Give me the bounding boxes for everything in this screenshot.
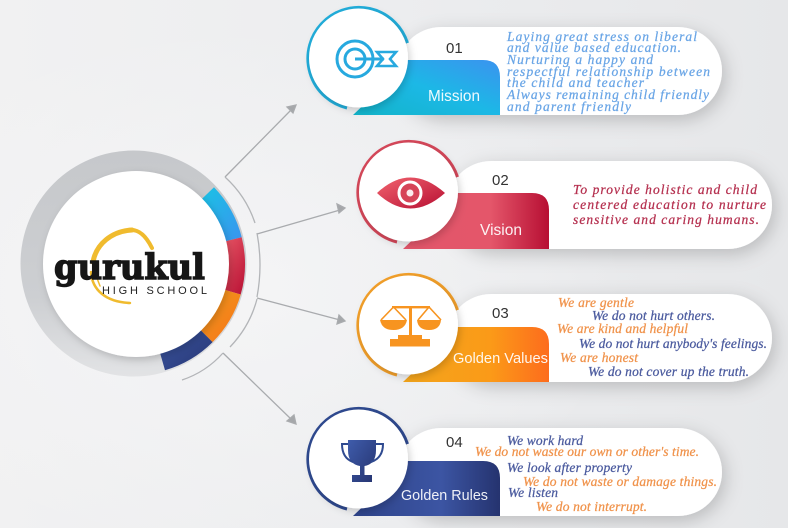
white disc [43,171,229,357]
pill [397,27,722,115]
description: We look after property [507,460,632,475]
pill [397,428,722,516]
ring segment: red [216,237,245,294]
description: We are kind and helpful [557,321,688,336]
number: 04 [446,434,463,451]
icon disc [309,8,408,108]
tab [353,60,500,115]
tab label: Golden Rules [401,488,488,504]
tab [403,193,549,249]
number: 03 [492,305,509,322]
logo wordmark: gurukul [54,247,205,288]
description: We are honest [560,350,639,365]
icon ring [358,141,458,242]
description: respectful relationship between [507,64,710,79]
number: 02 [492,172,509,189]
pill [447,294,772,382]
description: We work hard [507,433,583,448]
description: Always remaining child friendly [506,87,709,102]
description: sensitive and caring humans. [573,212,759,227]
description: We do not hurt others. [592,308,715,323]
description: the child and teacher [507,75,645,90]
description: We do not hurt anybody's feelings. [579,336,767,351]
description: We do not cover up the truth. [588,364,749,379]
icon disc [359,276,458,374]
description: We listen [508,485,558,500]
hub: outer thin arcs [182,177,260,380]
description [506,29,710,114]
description: and value based education. [507,40,681,55]
card 01: mission [308,7,722,115]
description: centered education to nurture [573,197,766,212]
description: We do not interrupt. [536,499,647,514]
logo subtitle: HIGH SCHOOL [102,285,207,297]
description: We do not waste our own or other's time. [475,444,699,459]
tab [403,327,549,382]
tab label: Mission [428,88,480,105]
icon disc [359,142,458,242]
card 02: vision [358,141,772,249]
description [475,433,717,514]
ring segment: navy [158,324,213,370]
description: Laying great stress on liberal [506,29,697,44]
logo swirl [91,230,152,303]
tab label: Vision [480,222,522,239]
card 03: golden values [358,274,772,382]
tab label: Golden Values [453,351,548,367]
description: Nurturing a happy and [506,52,653,67]
icon ring [308,408,408,509]
pill [447,161,772,249]
grey ring [20,150,246,376]
icon: target [337,41,396,77]
description [573,182,766,227]
ring segment: orange [195,287,241,342]
hub: central logo disc [20,150,246,376]
icon: eye [377,178,445,208]
description: To provide holistic and child [573,182,757,197]
logo: gurukul high school [54,230,207,303]
icon disc [309,410,408,508]
arrows from hub to cards [223,105,345,424]
tab [353,461,500,516]
ring segment: blue [196,187,242,243]
description: and parent friendly [507,99,631,114]
icon ring [358,274,458,375]
number: 01 [446,40,463,57]
description: We do not waste or damage things. [523,474,717,489]
icon ring [308,7,408,108]
icon: scales [380,306,441,346]
icon: trophy [342,440,383,482]
description: We are gentle [558,295,634,310]
description [557,295,767,379]
card 04: golden rules [308,408,722,516]
